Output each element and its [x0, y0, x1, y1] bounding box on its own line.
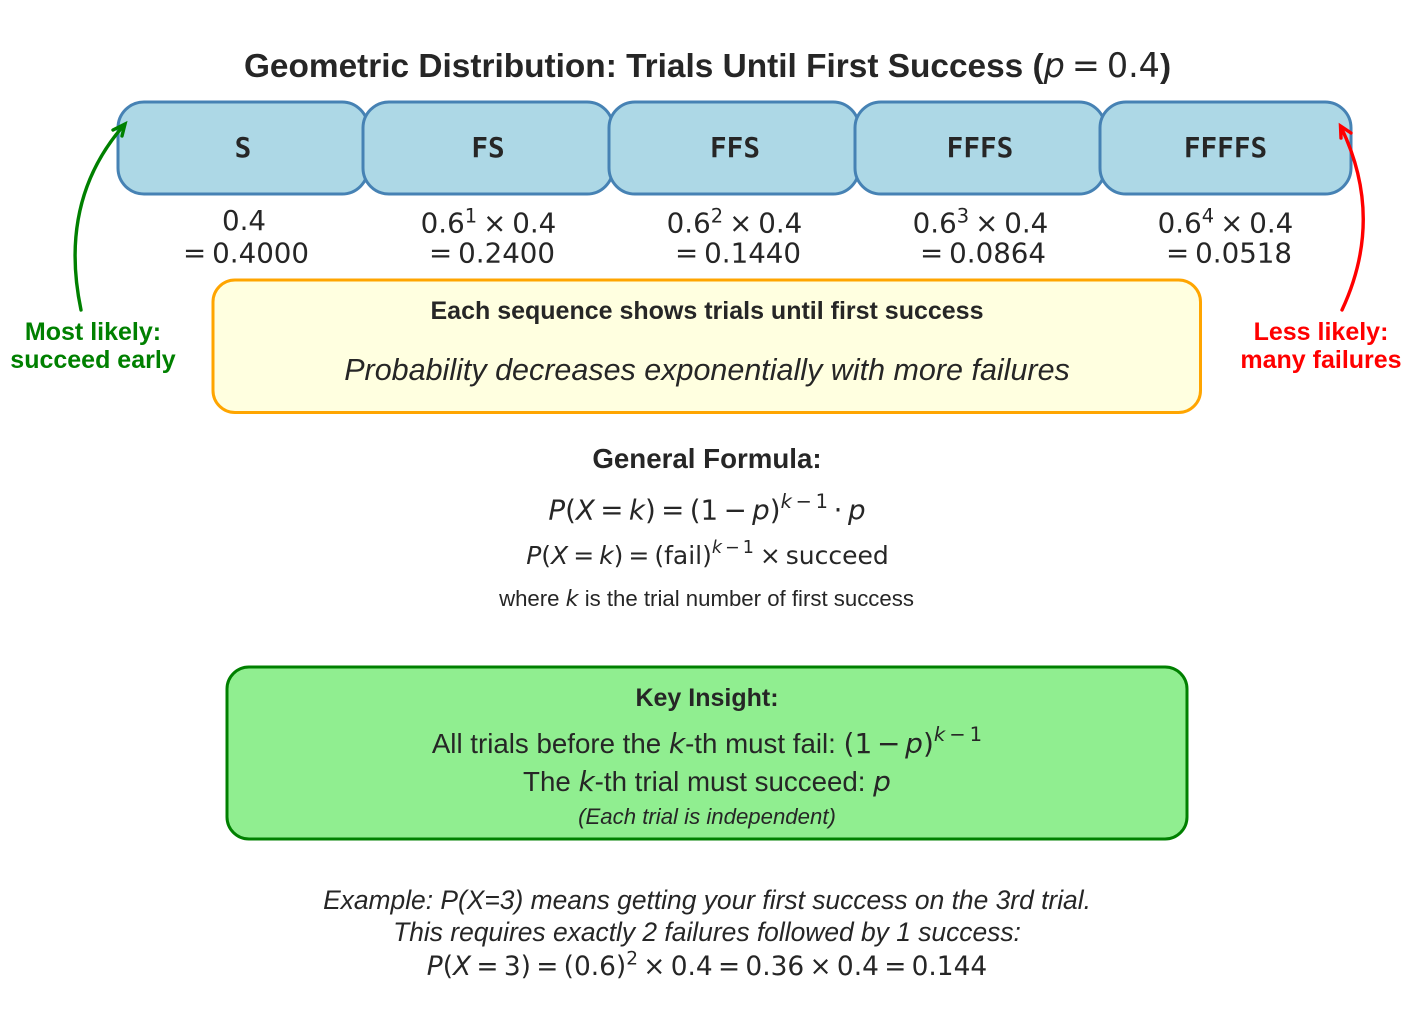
formula: symbolic: −1 — [796, 490, 828, 513]
note heading: Each sequence shows trials until first success — [430, 297, 984, 325]
probability: S: 0.4 — [222, 204, 266, 237]
insight heading: Key Insight: — [635, 684, 779, 712]
probability: FS — [421, 204, 556, 270]
probability: FFFS: 0.4 — [1004, 206, 1048, 240]
box: FFS — [609, 102, 859, 194]
formula: words: −1 — [725, 538, 754, 558]
probability: FFFS — [913, 204, 1048, 270]
probability: FFFFS: 4 — [1202, 204, 1214, 228]
probability: FS: 0.4 — [512, 206, 556, 240]
insight line 1: All trials before the k-th must fail: (1−p) — [432, 727, 934, 760]
arrow: green to first box — [75, 124, 125, 310]
probability: FFFFS: × — [1220, 206, 1243, 240]
example text: P(X=3)=(0.6) — [427, 951, 626, 982]
box: FFFFS: FFFFS — [1184, 131, 1267, 164]
formula: symbolic: P(X=k)=(1−p) — [548, 494, 781, 526]
box: FS — [363, 102, 613, 194]
label: most likely: Most likely: — [25, 318, 161, 346]
probability: FFFS: 0.6 — [913, 206, 957, 240]
probability: FS: × — [483, 206, 506, 240]
insight line 1: k — [934, 723, 946, 746]
insight line 3: (Each trial is independent) — [578, 804, 836, 829]
formula: words: k — [712, 538, 723, 558]
formula: symbolic: · — [834, 494, 842, 526]
example text: This requires exactly 2 failures followed by 1 success: — [393, 917, 1021, 947]
example text: Example: P(X=3) means getting your first success on the 3rd trial. — [323, 885, 1091, 915]
probability: FFFS: =0.0864 — [920, 236, 1046, 270]
probability: FFS: × — [729, 206, 752, 240]
probability: FFFS: × — [975, 206, 998, 240]
probability: FFFFS — [1158, 204, 1293, 270]
box: S: S — [235, 131, 251, 164]
probability: FS: 1 — [465, 204, 477, 228]
formula: words: × — [760, 541, 781, 570]
probability: S — [183, 204, 309, 270]
label: less likely: Less likely: — [1254, 318, 1388, 346]
box: FFFS — [855, 102, 1105, 194]
probability: FFS: 0.4 — [758, 206, 802, 240]
example text — [323, 885, 1091, 982]
heading: general formula: General Formula: — [592, 443, 822, 474]
probability: FFS: 2 — [711, 204, 723, 228]
example text: × — [643, 951, 665, 982]
insight line 1: −1 — [949, 723, 982, 746]
probability: FFFFS: 0.6 — [1158, 206, 1202, 240]
probability: FFS: =0.1440 — [675, 236, 801, 270]
probability: FFFFS: =0.0518 — [1166, 236, 1292, 270]
formula: symbolic: p — [847, 494, 866, 526]
panel: key insight — [227, 667, 1187, 839]
probability: FFFS: 3 — [957, 204, 969, 228]
title: Geometric Distribution: Trials Until First Success (p=0.4) — [244, 46, 1171, 85]
box: S — [118, 102, 368, 194]
probability: FS: 0.6 — [421, 206, 465, 240]
formula: words: P(X=k)=(fail) — [526, 541, 712, 570]
arrow: red to last box — [1340, 126, 1363, 310]
formula: words: succeed — [786, 541, 889, 570]
panel: note — [213, 280, 1200, 412]
box: FS: FS — [471, 131, 505, 164]
probability: S: =0.4000 — [183, 236, 309, 270]
probability: FFS: 0.6 — [667, 206, 711, 240]
formula note: where k is the trial number of first success — [498, 586, 914, 612]
box: FFFS: FFFS — [947, 131, 1013, 164]
probability: FFFFS: 0.4 — [1249, 206, 1293, 240]
sequence boxes — [118, 102, 1351, 194]
example text: 2 — [626, 948, 638, 970]
note text: Probability decreases exponentially with more failures — [344, 353, 1070, 387]
label: most likely: succeed early — [10, 346, 176, 374]
example text: 0.4=0.36×0.4=0.144 — [671, 951, 987, 982]
box: FFFFS — [1100, 102, 1351, 194]
insight line 2: The k-th trial must succeed: p — [523, 765, 891, 798]
formula: symbolic: k — [781, 490, 793, 513]
label: less likely: many failures — [1240, 346, 1402, 374]
probability: FS: =0.2400 — [429, 236, 555, 270]
probability: FFS — [667, 204, 802, 270]
box: FFS: FFS — [710, 131, 760, 164]
